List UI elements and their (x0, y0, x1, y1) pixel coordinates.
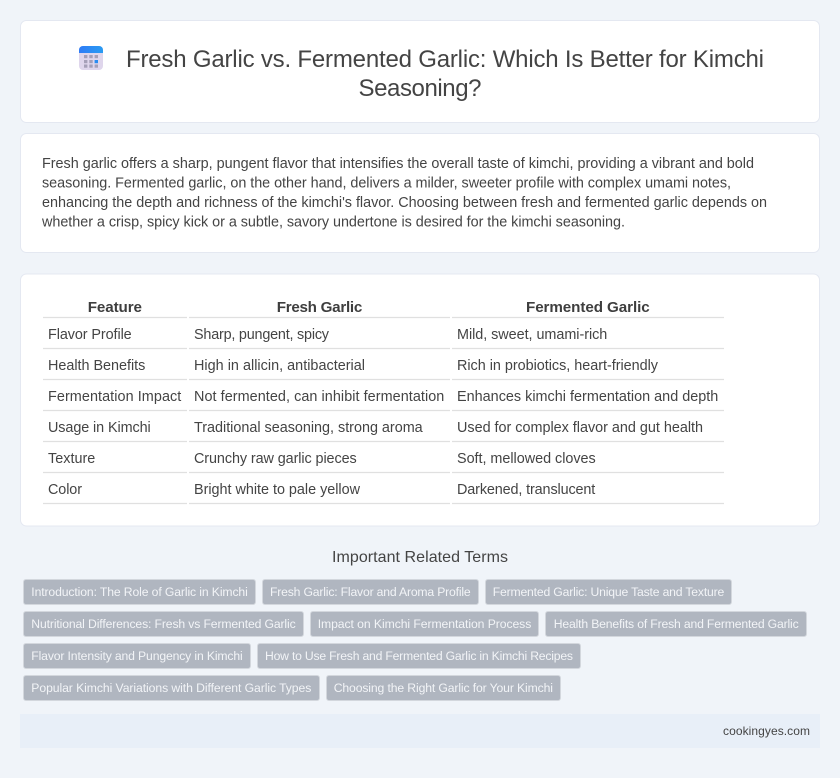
table row: fermentation impact: Not fermented, can inhibit fermentation (194, 389, 444, 405)
table row: flavor profile (48, 327, 607, 343)
icon: calendar (79, 46, 103, 70)
table row: health benefits: Rich in probiotics, heart-friendly (457, 358, 659, 374)
table row: health benefits: Health Benefits (48, 358, 145, 374)
table header (88, 299, 650, 316)
table row: usage in kimchi: Used for complex flavor and gut health (457, 420, 703, 436)
panel: introduction (20, 134, 820, 252)
text block: introduction paragraph (41, 156, 767, 230)
table row: flavor profile: Sharp, pungent, spicy (194, 327, 330, 343)
text block: introduction paragraph: enhancing the depth and richness of the kimchi's flavor. Choosing between fresh and fermented garlic depends on (42, 195, 767, 211)
tag: How to Use Fresh and Fermented Garlic in Kimchi Recipes (265, 649, 573, 663)
text block: introduction paragraph: seasoning. Fermented garlic, on the other hand, delivers a milder, sweeter profile with complex umami notes, (42, 176, 731, 192)
text block: introduction paragraph: whether a crisp, spicy kick or a subtle, savory undertone is desired for the kimchi seasoning. (41, 214, 625, 230)
tag: Health Benefits of Fresh and Fermented Garlic (554, 617, 799, 631)
tag (326, 676, 560, 700)
table row: health benefits: High in allicin, antibacterial (194, 358, 365, 374)
tag (262, 580, 478, 604)
tag (486, 580, 732, 604)
tag (310, 612, 538, 636)
table row: usage in kimchi: Usage in Kimchi (48, 420, 151, 436)
tag: Flavor Intensity and Pungency in Kimchi (31, 649, 243, 663)
tag: Popular Kimchi Variations with Different Garlic Types (31, 681, 311, 695)
table row: flavor profile: Flavor Profile (48, 327, 132, 343)
table row: color: Color (48, 482, 82, 498)
title (126, 46, 764, 102)
text block: introduction paragraph: Fresh garlic offers a sharp, pungent flavor that intensifies the overall taste of kimchi, providing a vibrant and bold (42, 156, 754, 172)
tag: Impact on Kimchi Fermentation Process (318, 617, 531, 631)
tag: Introduction: The Role of Garlic in Kimchi (31, 585, 248, 599)
table row: color: Darkened, translucent (457, 482, 595, 498)
tag (546, 612, 806, 636)
table row: health benefits (48, 358, 659, 374)
tag (24, 612, 304, 636)
table row: fermentation impact: Enhances kimchi fermentation and depth (457, 389, 718, 405)
tag (24, 644, 250, 668)
table row: texture: Soft, mellowed cloves (457, 451, 596, 467)
table row: texture: Texture (48, 451, 95, 467)
tag (24, 580, 256, 604)
table row: usage in kimchi: Traditional seasoning, strong aroma (194, 420, 423, 436)
tag: Fermented Garlic: Unique Taste and Texture (493, 585, 725, 599)
table header: Feature (88, 299, 142, 316)
panel: title header (20, 20, 820, 122)
table row: fermentation impact: Fermentation Impact (48, 389, 181, 405)
title: Seasoning? (358, 75, 482, 102)
table header: Fermented Garlic (526, 299, 650, 316)
tag: Choosing the Right Garlic for Your Kimchi (334, 681, 553, 695)
tag (258, 644, 580, 668)
tag (24, 676, 320, 700)
tag list: related terms (24, 580, 806, 700)
table row: usage in kimchi (48, 420, 703, 436)
footer: cookingyes.com (723, 724, 810, 738)
tag: Nutritional Differences: Fresh vs Fermented Garlic (31, 617, 296, 631)
panel: comparison table (20, 274, 820, 526)
table row: fermentation impact (48, 389, 718, 405)
table row: texture (48, 451, 596, 467)
title: Fresh Garlic vs. Fermented Garlic: Which Is Better for Kimchi (126, 46, 764, 73)
table row: color: Bright white to pale yellow (194, 482, 361, 498)
footer (20, 714, 820, 748)
table row: color (48, 482, 595, 498)
table row: texture: Crunchy raw garlic pieces (194, 451, 357, 467)
tag: Fresh Garlic: Flavor and Aroma Profile (270, 585, 471, 599)
table header: Fresh Garlic (277, 299, 362, 316)
table row: flavor profile: Mild, sweet, umami-rich (457, 327, 607, 343)
heading: important related terms: Important Related Terms (332, 549, 508, 566)
